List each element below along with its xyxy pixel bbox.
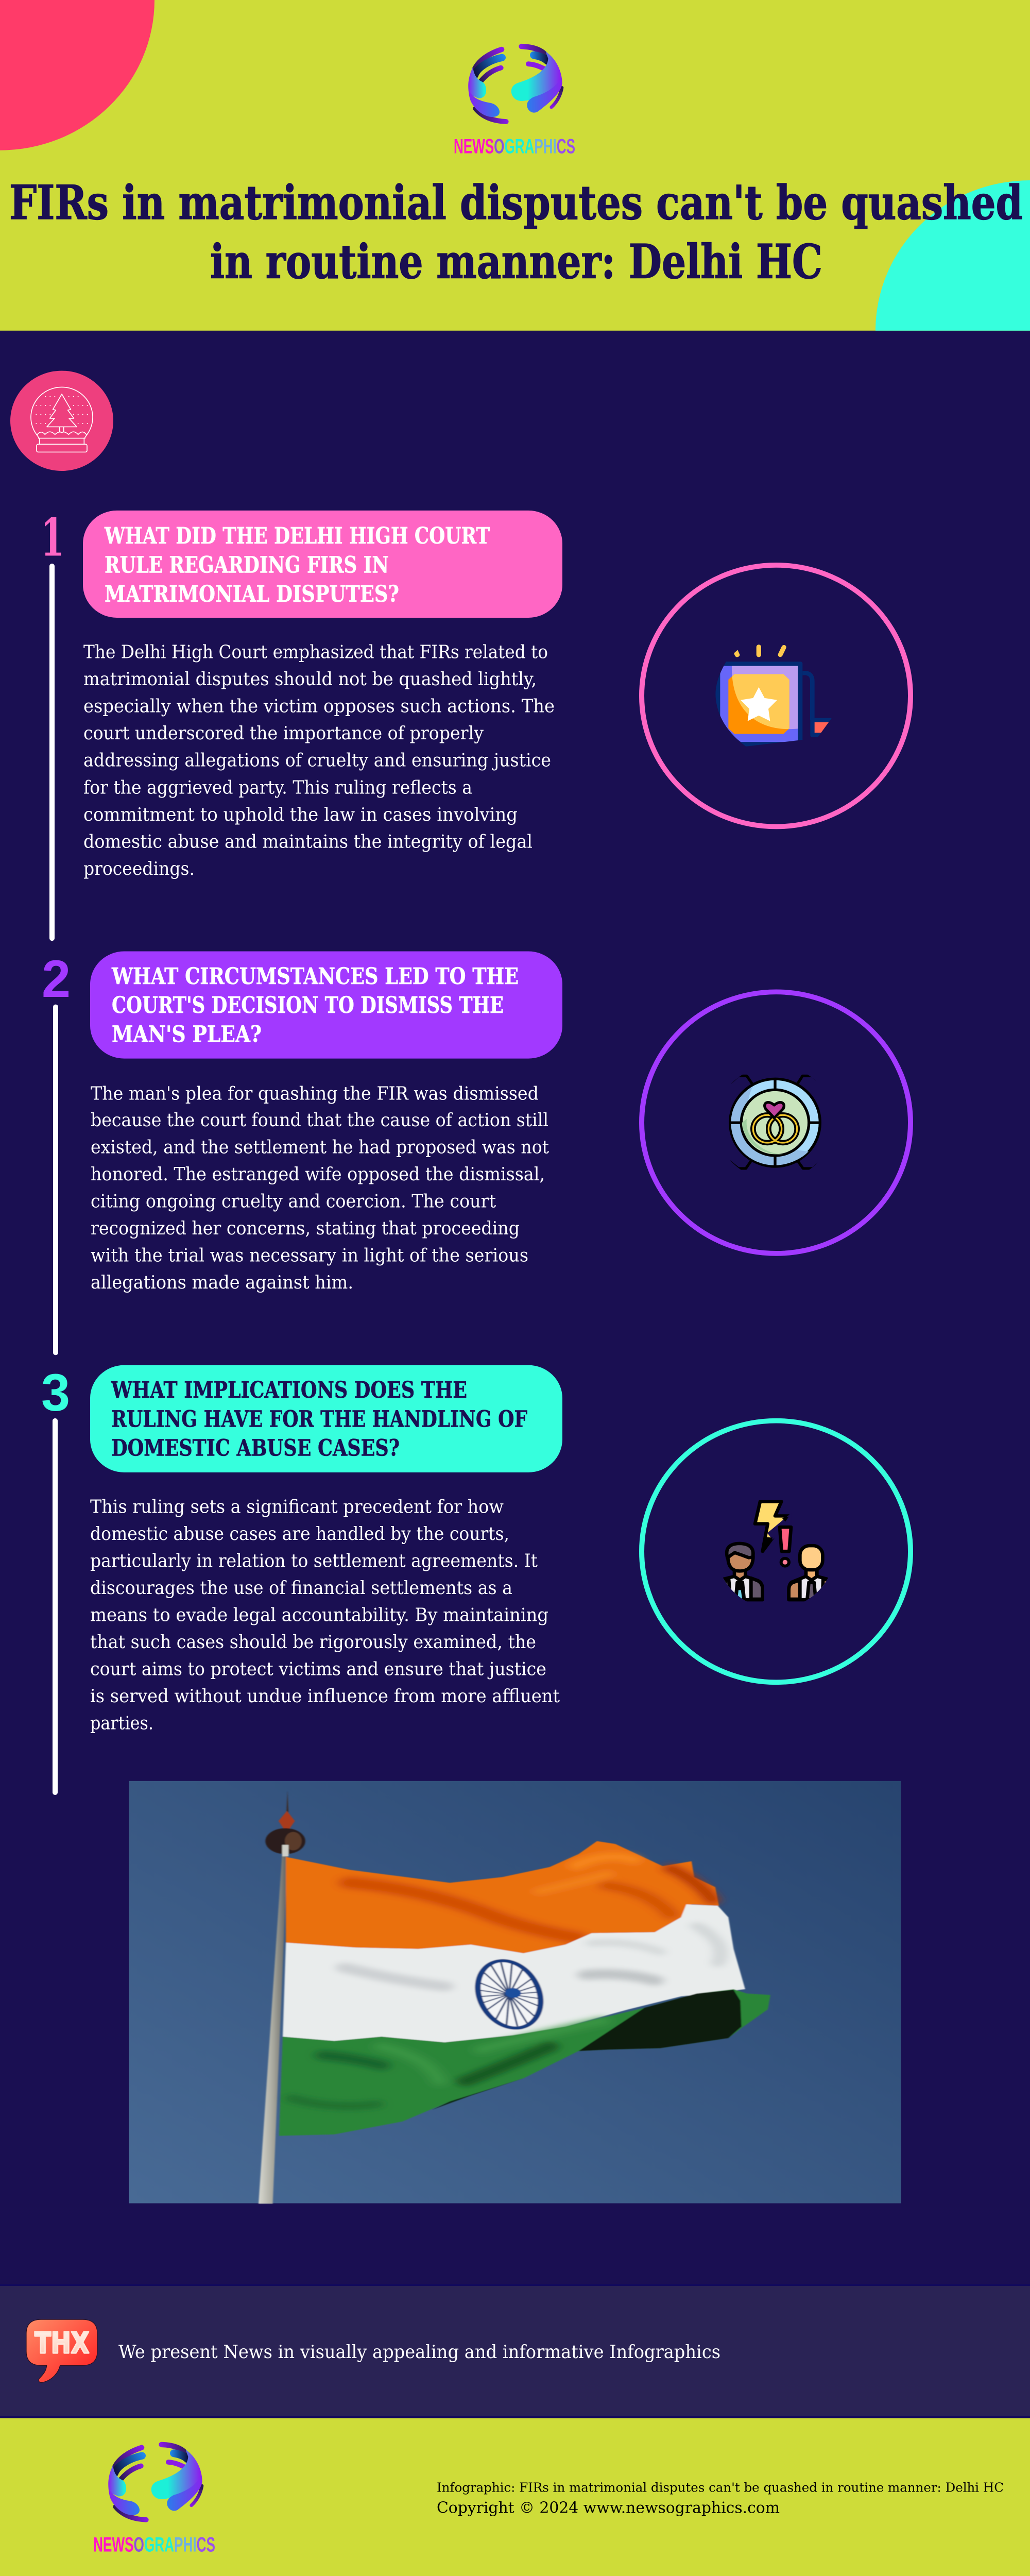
body text 1: domestic abuse and maintains the integrity of legal — [83, 832, 533, 852]
footer credit text: Copyright © 2024 www.newsographics.com — [437, 2499, 780, 2517]
body text 3: discourages the use of financial settlements as a — [90, 1578, 512, 1599]
logo: Newsographics: NEWSOGRAPHICS — [454, 134, 575, 158]
icon: snow globe — [10, 371, 113, 471]
body text 1: for the aggrieved party. This ruling reflects a — [83, 777, 472, 798]
body text 3: parties. — [90, 1713, 153, 1734]
footer logo: NEWSOGRAPHICS — [93, 2533, 215, 2556]
heading pill 3 — [90, 1365, 562, 1472]
icon: wedding rings with heart — [730, 1076, 821, 1168]
heading pill 3: RULING HAVE FOR THE HANDLING OF — [111, 1406, 527, 1432]
heading pill 1: WHAT DID THE DELHI HIGH COURT — [104, 523, 490, 549]
heading pill 3: WHAT IMPLICATIONS DOES THE — [111, 1377, 467, 1403]
body text 3 — [90, 1497, 560, 1734]
body text 3: domestic abuse cases are handled by the courts, — [90, 1524, 509, 1545]
body text 3: that such cases should be rigorously examined, the — [90, 1632, 536, 1653]
body text 1: The Delhi High Court emphasized that FIRs related to — [83, 642, 548, 663]
heading pill 2 — [90, 952, 562, 1059]
saffron band — [286, 1841, 719, 1953]
body text 1: commitment to uphold the law in cases involving — [83, 804, 518, 825]
circle ring 3 — [642, 1421, 911, 1682]
white band — [283, 1904, 745, 2042]
left man — [717, 1544, 763, 1600]
body text 1: matrimonial disputes should not be quashed lightly, — [83, 669, 537, 690]
body text 1: proceedings. — [83, 858, 195, 879]
icon: mug with star — [711, 645, 833, 747]
timeline bar 2 — [53, 1005, 58, 1355]
body text 2: because the court found that the cause of action still — [91, 1110, 548, 1131]
title: in routine manner: Delhi HC — [210, 234, 822, 289]
icon: two men in conflict with lightning — [717, 1502, 831, 1600]
green band — [279, 1989, 770, 2136]
icon: THX speech bubble — [26, 2319, 97, 2382]
decorative teal quarter circle — [876, 180, 1030, 331]
body text 2: with the trial was necessary in light of the serious — [91, 1245, 528, 1266]
tagline text: We present News in visually appealing and informative Infographics — [118, 2342, 720, 2363]
heading pill 1: MATRIMONIAL DISPUTES? — [105, 581, 399, 607]
body text 2: recognized her concerns, stating that proceeding — [91, 1218, 520, 1239]
footer credit text: Infographic: FIRs in matrimonial disputes can't be quashed in routine manner: Delhi HC — [437, 2480, 1004, 2495]
heading pill 1: RULE REGARDING FIRS IN — [105, 552, 389, 578]
Ashoka Chakra — [470, 1958, 548, 2030]
right man — [789, 1546, 831, 1600]
body text 1: addressing allegations of cruelty and ensuring justice — [83, 750, 551, 771]
body text 2: existed, and the settlement he had proposed was not — [91, 1137, 549, 1158]
panel: section 2 — [42, 949, 911, 1355]
body text 3: means to evade legal accountability. By maintaining — [90, 1605, 548, 1626]
body text 2: The man's plea for quashing the FIR was dismissed — [91, 1083, 539, 1104]
body text 1: court underscored the importance of properly — [83, 723, 484, 744]
body text 3: is served without undue influence from more affluent — [90, 1686, 560, 1707]
number 2: 2 — [42, 949, 71, 1008]
timeline bar 3 — [53, 1418, 58, 1795]
footer credit text — [437, 2480, 1004, 2517]
body text 1 — [83, 642, 555, 879]
logo: Newsographics — [454, 46, 575, 158]
number 1: 1 — [41, 507, 64, 568]
panel: section 1 — [41, 507, 911, 941]
icon: THX speech bubble: THX — [35, 2327, 89, 2360]
circle ring 2 — [642, 992, 911, 1253]
body text 2: allegations made against him. — [91, 1272, 353, 1293]
photo: Indian flag on pole — [129, 1781, 901, 2204]
panel: tagline band — [0, 2284, 1030, 2418]
body text 3: particularly in relation to settlement agreements. It — [90, 1551, 538, 1571]
heading pill 3: DOMESTIC ABUSE CASES? — [111, 1435, 400, 1462]
decorative red quarter circle — [0, 0, 154, 150]
heading pill 1 — [83, 511, 562, 618]
flag pole — [259, 1791, 305, 2204]
heading pill 2: COURT'S DECISION TO DISMISS THE — [112, 992, 504, 1019]
body text 2: honored. The estranged wife opposed the dismissal, — [91, 1164, 545, 1185]
panel: section 3 — [41, 1363, 911, 1795]
panel: header — [0, 0, 1030, 331]
heading pill 2: WHAT CIRCUMSTANCES LED TO THE — [111, 963, 519, 990]
body text 2: citing ongoing cruelty and coercion. The court — [91, 1191, 496, 1212]
title — [9, 175, 1023, 289]
body text 1: especially when the victim opposes such actions. The — [83, 696, 555, 717]
heading pill 2: MAN'S PLEA? — [112, 1021, 262, 1047]
timeline bar 1 — [49, 564, 55, 941]
body text 3: court aims to protect victims and ensure that justice — [90, 1659, 546, 1680]
body text 2 — [91, 1083, 549, 1293]
body text 3: This ruling sets a significant precedent for how — [90, 1497, 504, 1517]
number 3: 3 — [41, 1363, 70, 1422]
circle ring 1 — [642, 565, 911, 826]
footer logo — [93, 2445, 215, 2556]
panel: footer — [0, 2418, 1030, 2576]
